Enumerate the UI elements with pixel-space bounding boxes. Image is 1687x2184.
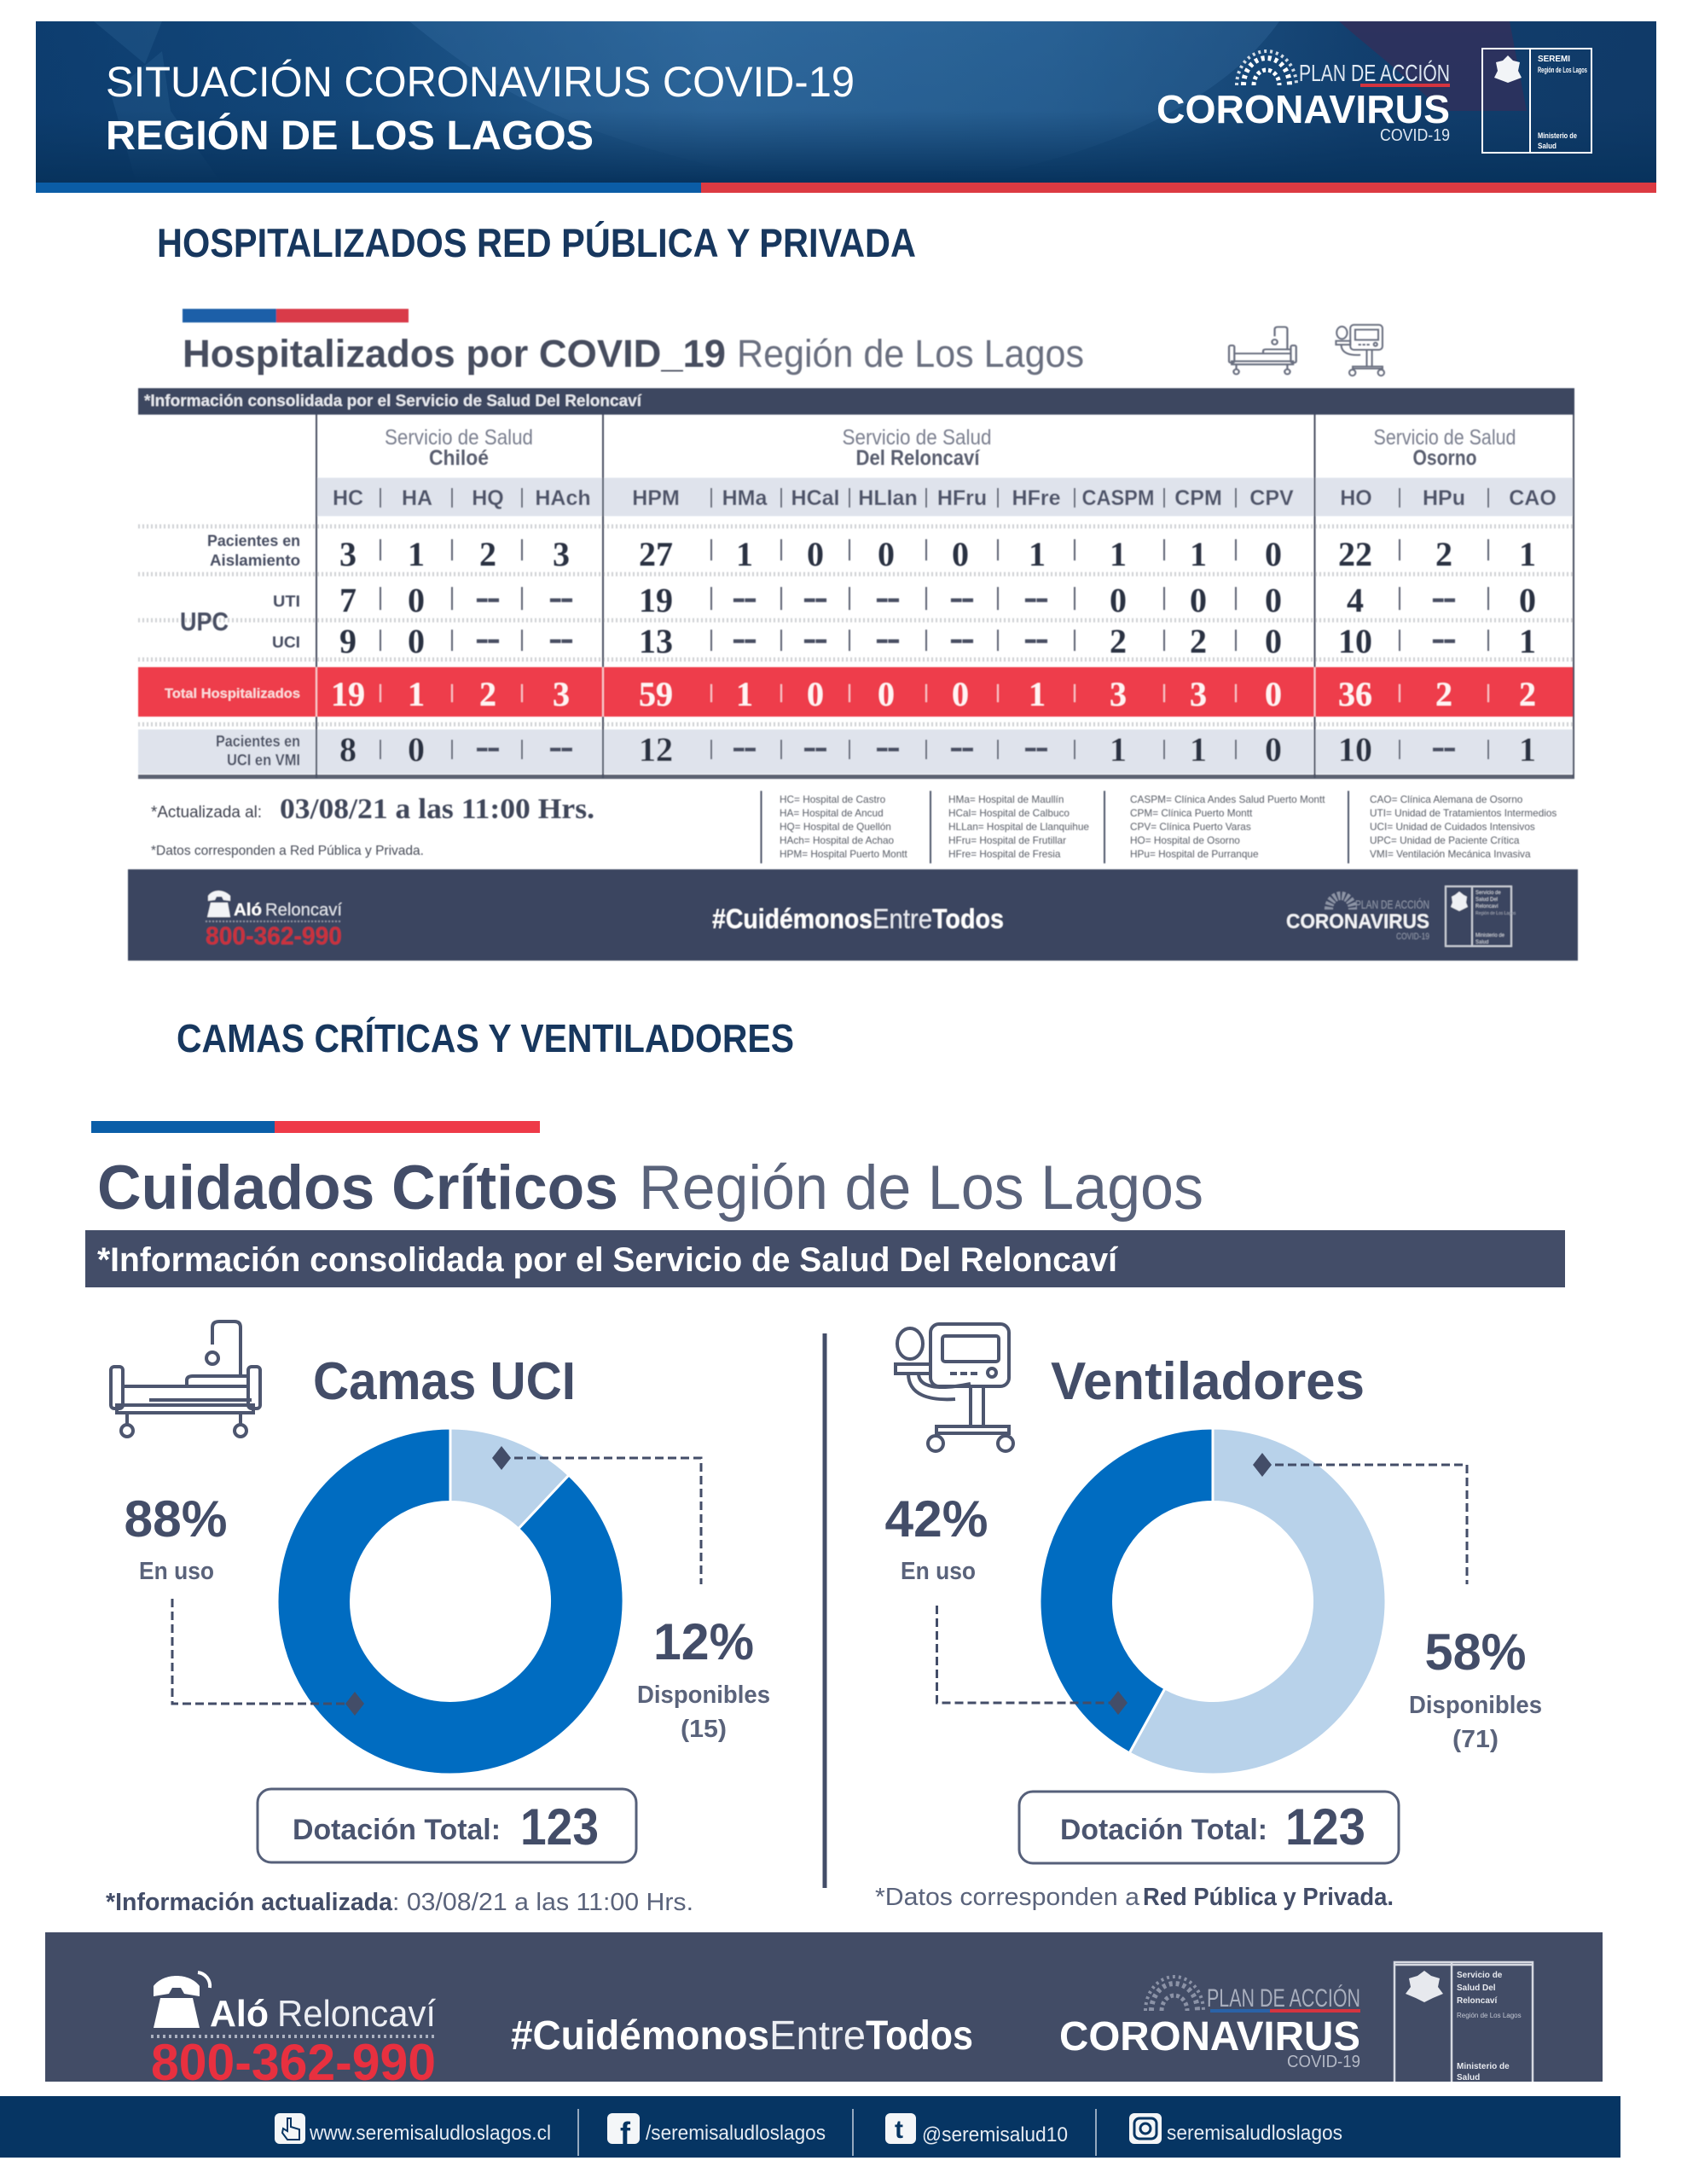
row: uti: -- [950,588,974,611]
row: pacientes en uci en vmi: 1 [1190,730,1207,769]
legend of abbreviations: HCal= Hospital de Calbuco [948,807,1070,819]
row labels: UCI en VMI [227,752,300,769]
table column headers [333,486,1557,510]
link: website: www.seremisaludloslagos.cl [309,2122,551,2145]
row: pacientes en aislamiento: 1 [1519,535,1536,573]
logo: plan de accion coronavirus: CORONAVIRUS [1157,87,1450,131]
table subtitle bar: *Información consolidada por el Servicio de Salud Del Reloncaví [144,392,642,410]
hashtag small: Entre [872,903,932,934]
table column headers: HA [402,486,432,510]
table column headers: HAch [535,486,591,510]
panel title bold: Hospitalizados por COVID_19 [183,332,726,375]
row: pacientes en aislamiento [339,535,1536,573]
row: uti: 0 [1110,581,1127,619]
legend of abbreviations [761,791,1557,863]
callout connector: en uso [172,1599,364,1716]
callout connector: disponibles [1253,1453,1467,1584]
icon: hospital bed small [1229,327,1296,375]
row: uti: -- [1025,588,1048,611]
row: uci: -- [1433,629,1456,652]
table column headers: CASPM [1081,486,1155,510]
logo: coronavirus small: CORONAVIRUS [1286,910,1429,933]
note: informacion actualizada: *Información actualizada [106,1889,393,1916]
row: total hospitalizados: 1 [408,675,425,713]
logo: plan de accion coronavirus [1157,51,1450,145]
heading: camas criticas y ventiladores: CAMAS CRÍTICAS Y VENTILADORES [177,1016,794,1060]
table column headers: HO [1340,486,1372,510]
panel: hospitalizados por covid table [128,309,1578,961]
row: pacientes en aislamiento: 1 [736,535,753,573]
row: uci: -- [1025,629,1048,652]
icon: ventilator [896,1324,1013,1451]
service header: chiloe [385,426,533,470]
logo: seremi ministerio de salud: Región de Los Lagos [1538,66,1587,74]
row: total hospitalizados: 0 [878,675,895,713]
table column headers: HQ [472,486,504,510]
row: total hospitalizados: 0 [807,675,824,713]
row: pacientes en aislamiento: 0 [878,535,895,573]
row: uti: 0 [1265,581,1282,619]
logo: coronavirus small: PLAN DE ACCIÓN [1355,897,1429,911]
service header: osorno [1373,426,1516,470]
table column headers: HFru [937,486,987,510]
legend of abbreviations: UPC= Unidad de Paciente Crítica [1370,834,1520,846]
update note: *Datos corresponden a Red Pública y Privada. [151,844,424,858]
divider [822,1333,827,1888]
row: uci: -- [877,629,900,652]
row: uti: 0 [1190,581,1207,619]
logo: seremi ministerio de salud [1482,49,1591,153]
logo: coronavirus [1059,1977,1360,2071]
alo reloncavi small: 800-362-990 [206,922,342,950]
legend of abbreviations: HO= Hospital de Osorno [1130,834,1240,846]
legend of abbreviations: CPM= Clínica Puerto Montt [1130,807,1253,819]
table column headers: HLlan [858,486,918,510]
legend of abbreviations: HAch= Hospital de Achao [780,834,895,846]
row: uti: 0 [1519,581,1536,619]
row: uci: -- [549,629,573,652]
table column headers: HPu [1423,486,1465,510]
alo reloncavi small: Reloncaví [265,901,342,920]
icon: ventilator small [1336,325,1384,375]
bottom social bar [0,2096,1620,2158]
logo: seremi small: Reloncaví [1475,904,1499,909]
logo: seremi small [1446,886,1516,946]
logo: seremi ministerio de salud: SEREMI [1538,55,1570,64]
row: pacientes en aislamiento: 27 [639,535,673,573]
panel title regular: Región de Los Lagos [639,1153,1203,1223]
row: uci: 10 [1338,622,1372,660]
service header: chiloe: Chiloé [429,446,489,470]
heading camas uci: Camas UCI [313,1352,576,1411]
donut chart: ventiladores [1040,1428,1386,1774]
logo: seremi ministerio de salud: Salud [1538,142,1557,150]
row: pacientes en aislamiento: 1 [1190,535,1207,573]
icon: facebook [607,2113,640,2151]
hashtag small: #Cuidémonos [712,903,872,934]
hashtag small: Todos [932,903,1004,934]
box: dotacion total: Dotación Total: [293,1814,501,1846]
legend of abbreviations: HA= Hospital de Ancud [780,807,884,819]
stat: 12% disponibles: Disponibles [637,1682,770,1709]
row: pacientes en uci en vmi: -- [1025,737,1048,760]
row: pacientes en uci en vmi [339,730,1536,769]
row: uti: -- [733,588,757,611]
table column headers: CPV [1249,486,1294,510]
row: pacientes en uci en vmi: 12 [639,730,673,769]
note: datos corresponden: *Datos corresponden a [875,1884,1140,1911]
hashtag [511,2013,973,2059]
row: uti: -- [476,588,500,611]
row: uci: 0 [1265,622,1282,660]
row: pacientes en aislamiento: 0 [952,535,969,573]
row: pacientes en uci en vmi: -- [733,737,757,760]
row labels: UPC [180,607,229,636]
update note [151,793,594,858]
alo reloncavi: Reloncaví [277,1993,437,2035]
box: dotacion total [1019,1792,1399,1863]
row labels: Pacientes en [207,532,300,549]
row: total hospitalizados: 59 [639,675,673,713]
row: uti: 7 [339,581,357,619]
row: pacientes en uci en vmi: 1 [1110,730,1127,769]
logo: coronavirus: CORONAVIRUS [1059,2014,1360,2059]
logo: seremi small: Servicio de [1475,891,1501,896]
header title line 2: REGIÓN DE LOS LAGOS [106,112,594,159]
row: uti: 4 [1347,581,1364,619]
row: pacientes en uci en vmi: -- [803,737,827,760]
icon: telephone [154,1967,210,2028]
legend of abbreviations: HLLan= Hospital de Llanquihue [948,821,1089,833]
row: uti: 0 [408,581,425,619]
row labels: Pacientes en [216,733,300,750]
row: total hospitalizados [331,675,1536,713]
row: pacientes en uci en vmi: -- [1433,737,1456,760]
legend of abbreviations: VMI= Ventilación Mecánica Invasiva [1370,848,1531,860]
link: facebook: /seremisaludloslagos [646,2122,826,2145]
service header: chiloe: Servicio de Salud [385,426,533,450]
update note: 03/08/21 a las 11:00 Hrs. [280,793,594,825]
row: pacientes en uci en vmi: 10 [1338,730,1372,769]
table subtitle bar [138,388,1574,415]
row: uci: 9 [339,622,357,660]
stat: 12% disponibles: 12% [653,1613,754,1670]
row: pacientes en uci en vmi: 1 [1519,730,1536,769]
row: uci: -- [476,629,500,652]
stat: 12% disponibles [637,1613,770,1743]
row: uci: 0 [408,622,425,660]
table column headers: CAO [1509,486,1557,510]
legend of abbreviations: HMa= Hospital de Maullín [948,793,1064,805]
row labels: UTI [273,593,300,610]
row: total hospitalizados: 1 [736,675,753,713]
service header: del reloncavi [843,426,991,470]
row: pacientes en uci en vmi: -- [549,737,573,760]
table column headers: HFre [1012,486,1061,510]
stat: 88% en uso: En uso [139,1558,214,1585]
row: total hospitalizados: 2 [1435,675,1452,713]
row: pacientes en uci en vmi: 0 [1265,730,1282,769]
row: total hospitalizados: 2 [1519,675,1536,713]
note: informacion actualizada: : 03/08/21 a las 11:00 Hrs. [392,1889,693,1916]
logo: seremi small: Ministerio de [1475,933,1505,938]
legend of abbreviations: HC= Hospital de Castro [780,793,886,805]
row: pacientes en aislamiento: 0 [807,535,824,573]
link: instagram: seremisaludloslagos [1167,2122,1342,2145]
icon: facebook: f [620,2116,631,2151]
row: pacientes en aislamiento: 1 [408,535,425,573]
icon: instagram [1129,2113,1162,2144]
legend of abbreviations: UTI= Unidad de Tratamientos Intermedios [1370,807,1557,819]
row: uci: -- [950,629,974,652]
row: pacientes en uci en vmi: 8 [339,730,357,769]
legend of abbreviations: UCI= Unidad de Cuidados Intensivos [1370,821,1535,833]
table column headers: HCal [791,486,839,510]
icon: website hand [275,2113,305,2144]
logo: coronavirus: COVID-19 [1287,2053,1360,2071]
panel accent bar [91,1121,540,1133]
row: total hospitalizados: 1 [1029,675,1046,713]
icon: tumblr [885,2113,916,2144]
legend of abbreviations: CASPM= Clínica Andes Salud Puerto Montt [1130,793,1325,805]
legend of abbreviations: HQ= Hospital de Quellón [780,821,891,833]
table background rows [138,415,1574,779]
alo reloncavi small [206,901,342,950]
row: pacientes en uci en vmi: -- [476,737,500,760]
table column headers: HPM [632,486,680,510]
service header: osorno: Servicio de Salud [1373,426,1516,450]
row: pacientes en aislamiento: 0 [1265,535,1282,573]
table column headers: HC [333,486,363,510]
logo: seremi salud del reloncavi: Salud [1457,2073,1480,2082]
section: camas uci [111,1321,770,1862]
hashtag: Entre [769,2013,866,2059]
row labels [165,532,300,769]
row: total hospitalizados: 3 [1110,675,1127,713]
row: total hospitalizados: 36 [1338,675,1372,713]
row: uti: -- [803,588,827,611]
stat: 88% en uso [125,1490,227,1585]
row: pacientes en aislamiento: 3 [553,535,570,573]
legend of abbreviations: HPM= Hospital Puerto Montt [780,848,908,860]
legend of abbreviations: CAO= Clínica Alemana de Osorno [1370,793,1523,805]
logo: seremi ministerio de salud: Ministerio de [1538,131,1577,140]
alo reloncavi small: Aló [234,901,262,920]
stat: 58% disponibles: 58% [1424,1623,1527,1681]
row: uci: -- [733,629,757,652]
stat: 42% en uso: 42% [885,1490,988,1548]
alo reloncavi: 800-362-990 [151,2034,436,2091]
row: uci: 13 [639,622,673,660]
logo: coronavirus small [1286,896,1429,942]
logo: seremi salud del reloncavi: Reloncaví [1457,1996,1498,2006]
logo: coronavirus small: COVID-19 [1396,932,1429,942]
row: uci: -- [803,629,827,652]
stat: 58% disponibles: Disponibles [1409,1692,1542,1719]
service header: del reloncavi: Del Reloncaví [856,446,980,470]
footer band of critical care panel [45,1932,1603,2091]
box: dotacion total: Dotación Total: [1060,1814,1267,1846]
stat: 42% en uso: En uso [901,1558,976,1585]
heading ventiladores: Ventiladores [1051,1352,1365,1411]
logo: seremi salud del reloncavi: Servicio de [1457,1971,1503,1980]
legend of abbreviations: HPu= Hospital de Purranque [1130,848,1259,860]
table column separators [380,488,1488,759]
row labels: Total Hospitalizados [165,687,300,701]
logo: plan de accion coronavirus: COVID-19 [1380,126,1450,145]
row: pacientes en aislamiento: 1 [1110,535,1127,573]
stat: 88% en uso: 88% [125,1490,227,1548]
heading: hospitalizados red publica y privada: HOSPITALIZADOS RED PÚBLICA Y PRIVADA [157,220,916,265]
row: pacientes en uci en vmi: 0 [408,730,425,769]
box: dotacion total: 123 [520,1798,599,1856]
logo: seremi salud del reloncavi: Ministerio de [1457,2062,1510,2071]
row: uci: 1 [1519,622,1536,660]
table column headers: CPM [1174,486,1222,510]
row: uci [339,622,1536,660]
row: uti: -- [1433,588,1456,611]
logo: coronavirus: PLAN DE ACCIÓN [1207,1984,1360,2013]
legend of abbreviations: HFre= Hospital de Fresia [948,848,1061,860]
icon: tumblr: t [895,2116,903,2144]
section: ventiladores [885,1324,1542,1863]
row: total hospitalizados: 3 [1190,675,1207,713]
box: dotacion total [258,1789,636,1862]
row labels: UCI [272,634,300,651]
subtitle bar [85,1230,1565,1287]
service header: osorno: Osorno [1412,446,1477,470]
row labels: Aislamiento [210,552,300,569]
icon: hospital bed [111,1321,260,1437]
subtitle bar: *Información consolidada por el Servicio de Salud Del Reloncaví [97,1241,1119,1279]
row: pacientes en uci en vmi: -- [877,737,900,760]
logo: plan de accion coronavirus: PLAN DE ACCIÓN [1299,60,1450,86]
table column headers: HMa [722,486,768,510]
panel title regular: Región de Los Lagos [737,332,1084,375]
row: pacientes en aislamiento: 1 [1029,535,1046,573]
row: uti: -- [549,588,573,611]
logo: seremi salud del reloncavi: Salud Del [1457,1984,1496,1993]
note: datos corresponden: Red Pública y Privada. [1143,1884,1394,1911]
stat: 58% disponibles [1409,1623,1542,1753]
row: total hospitalizados: 0 [952,675,969,713]
row: uti: -- [877,588,900,611]
hashtag: #Cuidémonos [511,2013,769,2059]
logo: seremi salud del reloncavi [1394,1962,1533,2082]
row: uci: 2 [1110,622,1127,660]
row: pacientes en aislamiento: 2 [1435,535,1452,573]
row: pacientes en aislamiento: 2 [479,535,496,573]
logo: seremi small: Salud Del [1475,897,1498,903]
row: pacientes en uci en vmi: -- [950,737,974,760]
link: tumblr: @seremisalud10 [922,2123,1068,2146]
row: total hospitalizados: 19 [331,675,365,713]
logo: seremi small: Región de Los Lagos [1475,911,1516,916]
callout connector: disponibles [492,1446,701,1584]
panel title bold: Cuidados Críticos [97,1153,618,1223]
panel: cuidados criticos [45,1121,1603,2091]
header title line 1: SITUACIÓN CORONAVIRUS COVID-19 [106,58,855,106]
icon: telephone small [207,891,230,917]
stat: 12% disponibles: (15) [681,1716,727,1743]
service header: del reloncavi: Servicio de Salud [843,426,991,450]
hashtag small [712,903,1004,934]
stat: 42% en uso [885,1490,988,1585]
logo: seremi salud del reloncavi: Región de Los Lagos [1457,2012,1522,2019]
stat: 58% disponibles: (71) [1452,1726,1499,1753]
panel accent bar [183,309,409,322]
alo reloncavi: Aló [210,1993,269,2035]
logo: seremi small: Salud [1475,940,1488,945]
row: pacientes en aislamiento: 22 [1338,535,1372,573]
callout connector: en uso [936,1606,1128,1715]
legend of abbreviations: CPV= Clínica Puerto Varas [1130,821,1251,833]
hashtag: Todos [866,2013,973,2059]
row: pacientes en aislamiento: 3 [339,535,357,573]
row: uti [339,581,1536,619]
row: uti: 19 [639,581,673,619]
legend of abbreviations: HFru= Hospital de Frutillar [948,834,1066,846]
row: uci: 2 [1190,622,1207,660]
donut chart: camas uci [277,1428,623,1774]
alo reloncavi [151,1993,437,2091]
footer band of table panel [128,869,1578,961]
update note: *Actualizada al: [151,804,262,822]
row: total hospitalizados: 2 [479,675,496,713]
note: informacion actualizada [106,1889,693,1916]
row: total hospitalizados: 0 [1265,675,1282,713]
header banner [36,21,1656,193]
note: datos corresponden [875,1884,1394,1911]
box: dotacion total: 123 [1285,1798,1365,1856]
row: total hospitalizados: 3 [553,675,570,713]
